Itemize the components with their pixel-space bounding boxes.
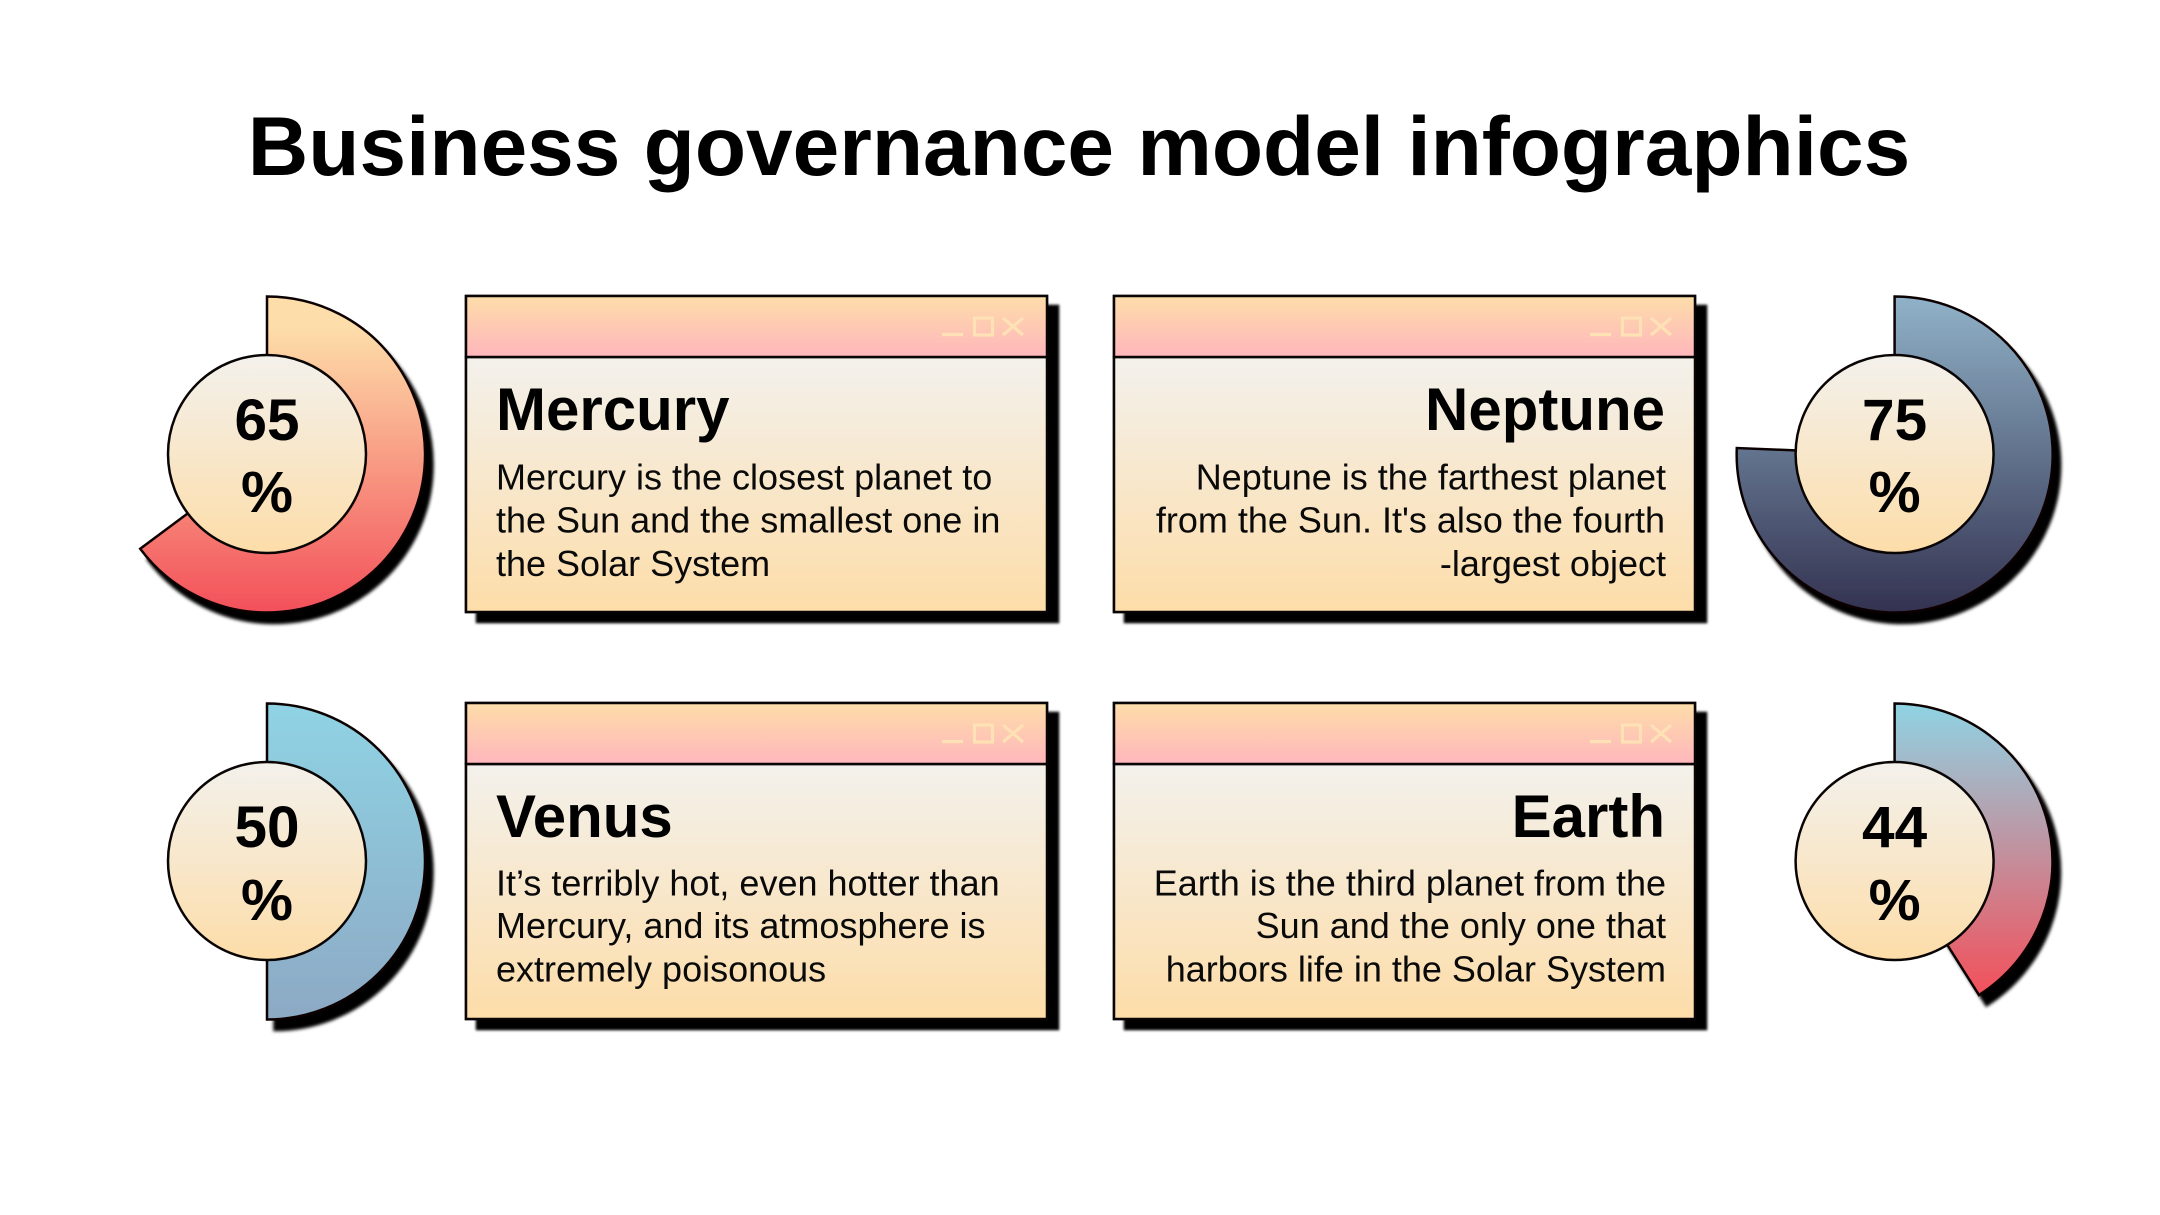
value: 75%: % — [1869, 460, 1921, 525]
body text: Neptune: from the Sun. It's also the fourth — [1156, 500, 1665, 540]
body text: Earth: harbors life in the Solar System — [1166, 948, 1666, 990]
donut chart: Neptune 75% — [1737, 296, 2053, 612]
body text: Venus: extremely poisonous — [496, 948, 826, 990]
window frame: Earth — [1114, 703, 1695, 1019]
window frame: Venus — [466, 703, 1047, 1019]
donut chart: Venus 50% — [168, 704, 425, 1020]
donut arc: Mercury — [140, 296, 425, 613]
title: Business governance model infographics — [248, 99, 1910, 193]
window icons: Neptune — [1590, 318, 1671, 335]
value: 50% — [234, 795, 300, 933]
donut chart: Earth 44% — [1796, 704, 2052, 995]
value: 50%: % — [241, 868, 293, 933]
donut arc: Venus — [267, 704, 425, 1020]
heading: Venus: Venus — [496, 783, 673, 850]
body text: Neptune: -largest object — [1440, 543, 1666, 584]
body text: Earth: Sun and the only one that — [1256, 905, 1666, 946]
value: 44% — [1862, 795, 1928, 933]
body text: Mercury: Mercury is the closest planet to — [496, 456, 992, 498]
title bar: Venus — [466, 703, 1047, 764]
window icons: Mercury — [942, 318, 1023, 335]
body text: Venus: It’s terribly hot, even hotter than — [496, 862, 1000, 904]
value: 75%: 75 — [1862, 388, 1927, 453]
title bar: Mercury — [466, 296, 1047, 357]
window body: Earth — [1114, 764, 1695, 1019]
body text: Venus: Mercury, and its atmosphere is — [496, 905, 986, 946]
body text: Mercury: the Sun and the smallest one in — [496, 500, 1000, 540]
panel: Mercury — [466, 296, 1047, 612]
value: 75% — [1862, 388, 1927, 525]
heading: Earth: Earth — [1512, 783, 1665, 850]
heading: Mercury: Mercury — [496, 376, 730, 443]
donut center: Mercury — [168, 355, 366, 553]
donut chart: Mercury 65% — [140, 296, 425, 613]
body text: Neptune: Neptune is the farthest planet — [1196, 456, 1666, 498]
panel: Earth — [1114, 703, 1695, 1019]
window body: Mercury — [466, 357, 1047, 612]
window icons: Earth — [1590, 725, 1671, 742]
title bar: Neptune — [1114, 296, 1695, 357]
value: 50%: 50 — [234, 795, 300, 860]
window frame: Neptune — [1114, 296, 1695, 612]
value: 44%: 44 — [1862, 795, 1928, 860]
value: 65%: % — [241, 460, 293, 525]
body text: Earth: Earth is the third planet from the — [1154, 862, 1666, 904]
panel: Venus — [466, 703, 1047, 1019]
value: 65% — [234, 388, 300, 525]
window icons: Venus — [942, 725, 1023, 742]
window body: Neptune — [1114, 357, 1695, 612]
donut center: Earth — [1796, 762, 1994, 960]
value: 44%: % — [1869, 868, 1921, 933]
donut center: Venus — [168, 762, 366, 960]
window frame: Mercury — [466, 296, 1047, 612]
title bar: Earth — [1114, 703, 1695, 764]
donut center: Neptune — [1796, 355, 1994, 553]
heading: Neptune: Neptune — [1425, 376, 1665, 443]
value: 65%: 65 — [234, 388, 300, 453]
donut arc: Earth — [1895, 704, 2052, 995]
panel: Neptune — [1114, 296, 1695, 612]
window body: Venus — [466, 764, 1047, 1019]
body text: Mercury: the Solar System — [496, 543, 770, 584]
donut arc: Neptune — [1737, 296, 2053, 612]
